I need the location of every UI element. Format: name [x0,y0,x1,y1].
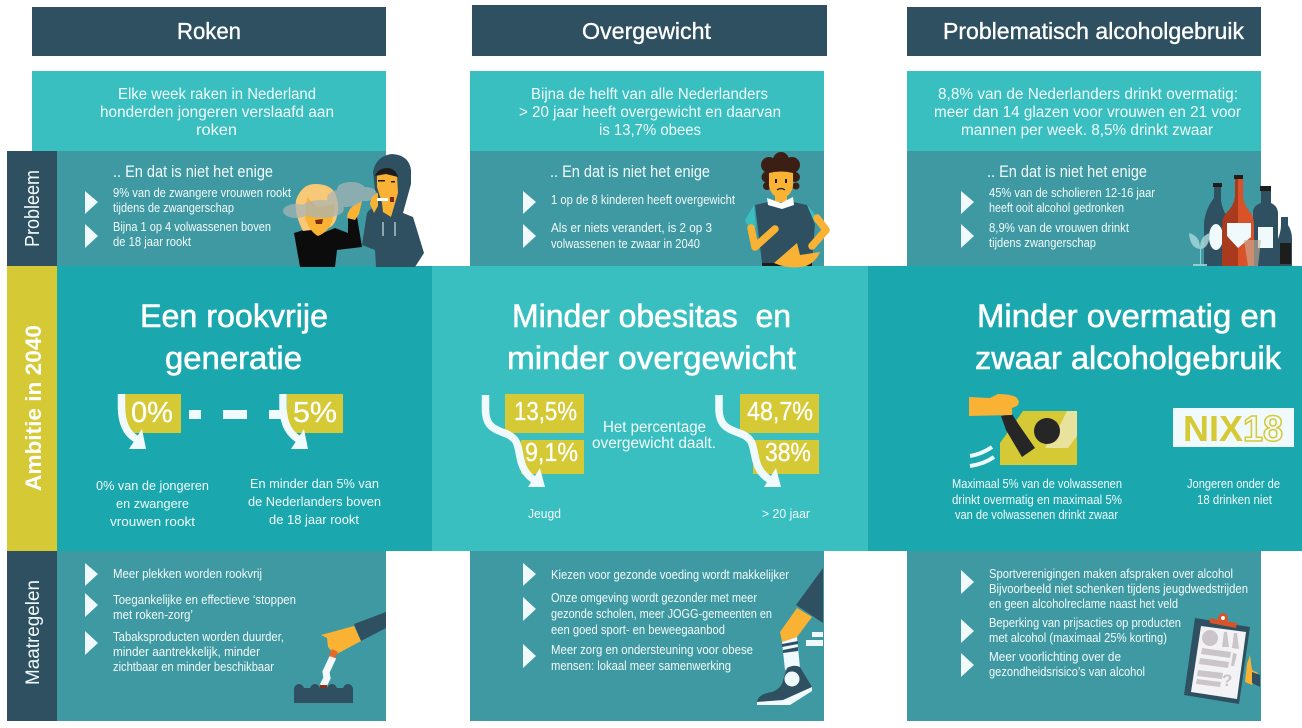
intro: overgewicht: is 13,7% obees [599,122,701,139]
heading: Roken: Roken [177,18,241,44]
intro: overgewicht: > 20 jaar heeft overgewicht en daarvan [519,104,781,121]
heading: Overgewicht: Overgewicht [582,18,712,44]
heading: Minder obesitas en minder overgewicht: minder overgewicht [507,340,796,376]
panel: maatregelen roken [57,551,386,721]
text: maximaal 5%: Maximaal 5% van de volwassenen [952,477,1122,491]
text: 0% target: 0% van de jongeren [96,478,209,493]
intro: alcohol: 8,8% van de Nederlanders drinkt overmatig: [938,86,1238,103]
text: 0% target [96,478,209,529]
intro: overgewicht [470,71,824,151]
panel: probleem alcohol: .. En dat is niet het enige [987,163,1147,181]
panel: maatregelen alcohol: Sportverenigingen maken afspraken over alcohol [989,567,1233,581]
panel: probleem roken: Bijna 1 op 4 volwassenen boven [113,220,271,234]
chart: volwassenen 48,7% to 38% [719,394,819,487]
panel: maatregelen overgewicht [470,551,824,721]
icon: smokers [283,154,424,267]
chart: volwassenen 48,7% to 38%: 38% [765,437,811,467]
text: maximaal 5%: van de volwassenen drinkt zwaar [955,508,1118,522]
intro: alcohol: meer dan 14 glazen voor vrouwen en 21 voor [934,104,1241,121]
panel: ambition bands [57,266,1302,551]
panel: maatregelen alcohol: Meer voorlichting over de [989,650,1121,664]
heading: Minder obesitas en minder overgewicht: Minder obesitas en [512,298,791,334]
panel: maatregelen overgewicht: gezonde scholen, meer JOGG-gemeenten en [551,607,772,621]
panel: probleem overgewicht: volwassenen te zwaar in 2040 [551,237,700,251]
heading: Minder overmatig en zwaar alcoholgebruik: Minder overmatig en [977,298,1277,334]
panel: probleem overgewicht [470,151,824,266]
chart: 5% target: 5% [293,397,337,429]
logo: NIX18: NIX [1183,408,1243,449]
panel: probleem overgewicht: 1 op de 8 kinderen heeft overgewicht [551,193,735,207]
chart: jeugd 13,5% to 9,1%: 9,1% [525,437,578,467]
intro: roken: Elke week raken in Nederland [118,86,316,103]
side label: Ambitie in 2040: Ambitie in 2040 [21,325,46,491]
heading: Problematisch alcoholgebruik: Problematisch alcoholgebruik [943,18,1245,44]
icon: bottles [1189,175,1292,266]
panel: probleem roken [57,151,386,266]
panel: probleem roken: tijdens de zwangerschap [113,201,234,215]
panel: maatregelen alcohol: gezondheidsrisico’s van alcohol [989,665,1145,679]
panel: maatregelen overgewicht: Kiezen voor gezonde voeding wordt makkelijker [551,568,789,582]
panel: maatregelen overgewicht: Meer zorg en ondersteuning voor obese [551,643,753,657]
side label: Probleem: Probleem [22,170,44,247]
intro: alcohol: mannen per week. 8,5% drinkt zwaar [961,122,1213,139]
panel: maatregelen roken: minder aantrekkelijk, minder [113,645,260,659]
heading: Een rookvrije generatie [140,298,328,376]
panel: probleem alcohol: heeft ooit alcohol gedronken [989,201,1124,215]
panel: maatregelen roken: Meer plekken worden rookvrij [113,567,262,581]
side label: Maatregelen: Maatregelen [23,580,44,685]
panel: maatregelen overgewicht: mensen: lokaal meer samenwerking [551,659,731,673]
intro: roken: honderden jongeren verslaafd aan [100,104,334,121]
text: maximaal 5%: drinkt overmatig en maximaal 5% [952,493,1122,507]
text: maximaal 5% [952,477,1122,522]
chart: 0% target: 0% [131,397,173,429]
panel: maatregelen alcohol: met alcohol (maximaal 25% korting) [989,631,1167,645]
text: jongeren onder de 18: 18 drinken niet [1197,493,1272,507]
chart: jeugd 13,5% to 9,1% [486,394,584,487]
text: 5% target [248,476,381,527]
text: jongeren onder de 18 [1187,477,1280,507]
icon: running leg [757,568,823,705]
text: 5% target: En minder dan 5% van [250,476,379,491]
text: het percentage daalt [592,419,716,452]
intro: roken [32,71,386,151]
icon: overweight man [745,152,826,267]
text: 5% target: de 18 jaar rookt [269,512,359,527]
panel: maatregelen roken: met roken-zorg’ [113,608,193,622]
chart: jeugd 13,5% to 9,1%: 13,5% [514,396,577,426]
panel: probleem alcohol: 45% van de scholieren 12-16 jaar [989,186,1155,200]
icon: hand taking bottle [969,394,1077,466]
text: 0% target: vrouwen rookt [110,514,195,529]
panel: probleem overgewicht: Als er niets verandert, is 2 op 3 [551,221,712,235]
intro: overgewicht: Bijna de helft van alle Nederlanders [531,86,768,103]
icon: clipboard: ? [1222,671,1232,690]
text: het percentage daalt: Het percentage [603,419,706,436]
side label: Probleem [7,151,57,266]
heading: Minder obesitas en minder overgewicht [507,298,796,376]
panel: maatregelen roken: Toegankelijke en effectieve ‘stoppen [113,593,296,607]
panel: probleem roken: .. En dat is niet het enige [113,163,273,181]
panel: maatregelen roken: Tabaksproducten worden duurder, [113,630,284,644]
label: Jeugd: Jeugd [528,507,561,521]
label: > 20 jaar: > 20 jaar [762,507,810,521]
heading: Problematisch alcoholgebruik [907,7,1261,56]
panel: probleem roken: de 18 jaar rookt [113,235,191,249]
panel: probleem alcohol: 8,9% van de vrouwen drinkt [989,221,1129,235]
side label: Ambitie in 2040 [7,266,57,551]
heading: Een rookvrije generatie: generatie [165,340,302,376]
heading: Een rookvrije generatie: Een rookvrije [140,298,328,334]
logo: NIX18 [1173,408,1294,449]
panel: maatregelen alcohol: en geen alcoholreclame naast het veld [989,597,1178,611]
panel: maatregelen alcohol: Beperking van prijsacties op producten [989,616,1181,630]
text: het percentage daalt: overgewicht daalt. [592,435,716,452]
dashed connector [189,410,282,419]
intro: roken: roken [196,122,237,139]
heading: Minder overmatig en zwaar alcoholgebruik [975,298,1282,376]
icon: hand stubbing cigarette [294,612,386,703]
panel: probleem alcohol [907,151,1261,266]
panel: maatregelen alcohol: Bijvoorbeeld niet schenken tijdens jeugdwedstrijden [989,582,1248,596]
panel: maatregelen overgewicht: Onze omgeving wordt gezonder met meer [551,591,757,605]
heading: Minder overmatig en zwaar alcoholgebruik: zwaar alcoholgebruik [975,340,1282,376]
text: jongeren onder de 18: Jongeren onder de [1187,477,1280,491]
panel: probleem alcohol: tijdens zwangerschap [989,236,1096,250]
text: 5% target: de Nederlanders boven [248,494,381,509]
chart: 0% target [122,394,181,449]
icon: clipboard [1184,613,1260,704]
panel: maatregelen alcohol [907,551,1261,721]
panel: maatregelen overgewicht: een goed sport- en beweegaanbod [551,623,725,637]
text: 0% target: en zwangere [116,496,189,511]
panel: probleem overgewicht: .. En dat is niet het enige [550,163,710,181]
panel: probleem roken: 9% van de zwangere vrouwen rookt [113,186,291,200]
logo: NIX18: 18 [1243,408,1283,449]
heading: Roken [32,7,386,56]
chart: 5% target [283,394,343,449]
side label: Maatregelen [7,551,57,721]
chart: volwassenen 48,7% to 38%: 48,7% [747,396,813,426]
heading: Overgewicht [472,5,827,56]
intro: alcohol [907,71,1261,151]
panel: maatregelen roken: zichtbaar en minder beschikbaar [113,660,274,674]
